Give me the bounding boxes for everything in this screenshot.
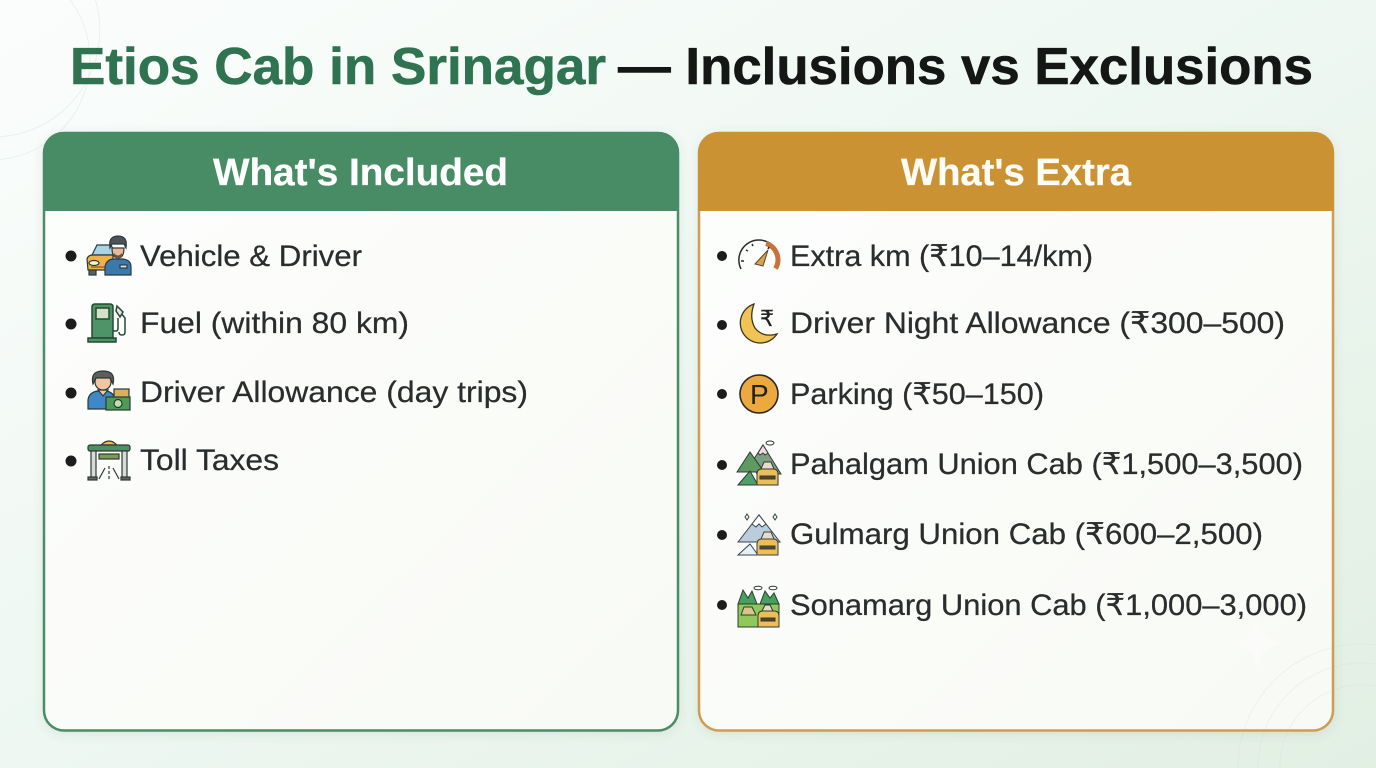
list item: vehicle and driver xyxy=(66,236,362,275)
title: — Inclusions vs Exclusions xyxy=(618,38,1313,96)
list item: gulmarg union cab: Gulmarg Union Cab (₹600–2,500) xyxy=(790,518,1263,551)
list item: fuel: Fuel (within 80 km) xyxy=(140,307,409,340)
list item: fuel xyxy=(66,304,409,342)
list item: toll taxes xyxy=(66,441,279,481)
icon: snowy mountain with cab xyxy=(738,514,780,555)
icon: parking sign xyxy=(740,375,778,413)
title: Etios Cab in Srinagar xyxy=(70,38,606,96)
panel: what's extra xyxy=(697,132,1335,734)
list item: pahalgam union cab xyxy=(717,441,1303,485)
list item: parking xyxy=(717,375,1044,413)
icon: speedometer xyxy=(739,240,779,269)
list item: sonamarg union cab: Sonamarg Union Cab (₹1,000–3,000) xyxy=(790,589,1307,622)
panel header: what's included: What's Included xyxy=(213,152,508,194)
list item: toll taxes: Toll Taxes xyxy=(140,444,279,477)
list item: gulmarg union cab xyxy=(717,514,1263,555)
panel header: what's extra: What's Extra xyxy=(901,152,1132,194)
title xyxy=(70,38,1313,96)
panel header: what's extra xyxy=(698,132,1334,211)
icon: parking sign: P xyxy=(750,379,769,410)
icon: driver with cash xyxy=(88,371,130,410)
list item: pahalgam union cab: Pahalgam Union Cab (₹1,500–3,500) xyxy=(790,448,1303,481)
icon: meadow with cab xyxy=(738,586,779,627)
panel header: what's included xyxy=(43,132,679,211)
list item: sonamarg union cab xyxy=(717,586,1307,627)
panel: what's included xyxy=(43,132,679,730)
list item: driver night allowance: Driver Night Allowance (₹300–500) xyxy=(790,307,1285,340)
list item: extra km: Extra km (₹10–14/km) xyxy=(790,240,1093,273)
icon: car and driver xyxy=(87,236,131,275)
list item: driver allowance: Driver Allowance (day trips) xyxy=(140,376,528,409)
list item: vehicle and driver: Vehicle & Driver xyxy=(140,240,362,273)
list item: driver night allowance xyxy=(717,304,1285,343)
icon: toll gate xyxy=(88,441,130,481)
icon: moon with rupee xyxy=(740,304,777,343)
list item: driver allowance xyxy=(66,371,528,410)
list item: parking: Parking (₹50–150) xyxy=(790,378,1044,411)
icon: green mountains with cab xyxy=(737,441,781,485)
icon: moon with rupee: ₹ xyxy=(760,306,774,331)
icon: fuel pump xyxy=(88,304,125,342)
